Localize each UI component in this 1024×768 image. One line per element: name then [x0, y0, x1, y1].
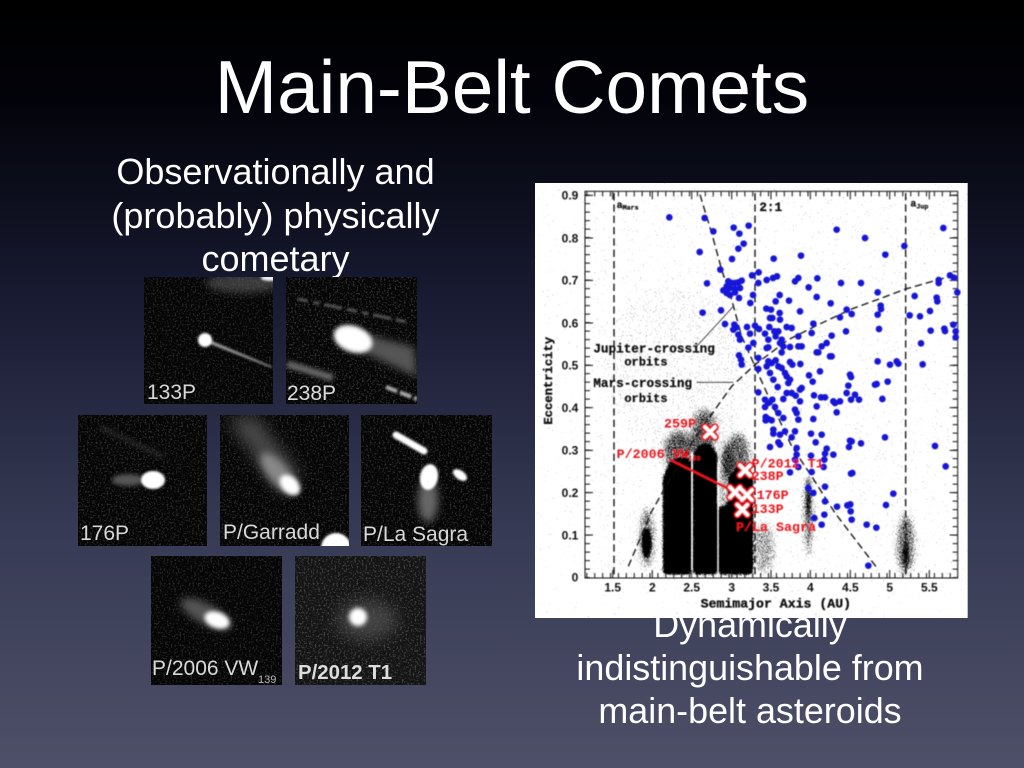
comet image: P/La Sagra [361, 415, 492, 546]
comet image: P/2006 VW139 [151, 556, 282, 686]
dense main belt [643, 445, 909, 574]
comet image: P/Garradd [220, 415, 349, 546]
text block: observationally cometary: (probably) physically [111, 195, 440, 236]
axis titles: Semimajor Axis (AU) [701, 597, 851, 612]
title: Main-Belt Comets [215, 45, 809, 129]
axis titles [542, 336, 851, 612]
axis tick labels: 0.4 [562, 401, 579, 415]
axis tick labels: 4.5 [842, 581, 859, 595]
axis tick labels: 0.1 [562, 528, 579, 542]
annotation labels: crossing orbits: orbits [624, 356, 668, 370]
red comet labels: 176P [757, 489, 789, 504]
panel: eccentricity vs semimajor axis chart [535, 183, 968, 618]
axis tick labels: 0.5 [562, 359, 579, 373]
main-belt comet markers [705, 427, 752, 515]
axis tick labels: 0.2 [562, 486, 579, 500]
comet image: 176P [78, 415, 207, 546]
red track line [670, 460, 728, 488]
annotation labels: crossing orbits: 2:1 [759, 200, 783, 215]
text block: dynamically indistinguishable: main-belt asteroids [598, 691, 902, 731]
comet image: P/La Sagra: P/La Sagra [363, 523, 468, 546]
text block: observationally cometary [111, 151, 440, 279]
axis tick labels: 3 [728, 581, 735, 595]
text block: dynamically indistinguishable: indistinguishable from [576, 648, 924, 688]
red comet labels: P/2012 T1 [752, 458, 824, 473]
asteroid scatter cloud [586, 192, 958, 578]
axis titles: Eccentricity [542, 336, 556, 425]
Kirkwood gaps [692, 453, 718, 576]
annotation labels: crossing orbits: a [910, 199, 916, 210]
comet image: P/2006 VW139: 139 [258, 674, 276, 686]
annotation labels: crossing orbits: a [617, 201, 623, 212]
red comet labels [617, 417, 824, 536]
red comet labels: 259P [664, 417, 696, 432]
annotation labels: crossing orbits: Jup [916, 202, 928, 210]
axis tick labels: 3.5 [763, 581, 780, 595]
red comet labels: P/2006 VW [617, 448, 689, 463]
axis tick labels: 1.5 [604, 581, 621, 595]
axis tick labels: 2.5 [683, 581, 700, 595]
dashed orbit boundaries and resonances [614, 193, 957, 577]
axis tick labels: 0.8 [562, 231, 579, 245]
red comet labels: 139 [689, 455, 701, 463]
axis tick labels: 0.7 [562, 274, 579, 288]
comet image: P/Garradd: P/Garradd [223, 521, 320, 544]
axis tick labels: 5.5 [921, 581, 938, 595]
comet image: 176P: 176P [80, 522, 129, 545]
axis tick labels: 4 [807, 581, 814, 595]
annotation labels: crossing orbits: orbits [624, 392, 668, 406]
red comet labels: P/La Sagra [736, 521, 816, 536]
axis tick labels: 0 [572, 571, 579, 585]
axis tick labels: 0.9 [562, 189, 579, 203]
comet image: P/2012 T1: P/2012 T1 [298, 662, 392, 684]
comet image: 133P: 133P [147, 381, 196, 404]
axis tick labels: 0.3 [562, 444, 579, 458]
text block: observationally cometary: cometary [201, 238, 350, 279]
comet image: 133P [144, 277, 273, 404]
axis tick labels: 5 [886, 581, 893, 595]
annotation labels: crossing orbits [593, 199, 928, 406]
comet image: P/2012 T1 [295, 556, 426, 685]
axis tick labels: 0.6 [562, 316, 579, 330]
annotation labels: crossing orbits: Mars-crossing [593, 376, 692, 391]
comet image: P/2006 VW139: P/2006 VW [152, 657, 258, 680]
annotation labels: crossing orbits: Jupiter-crossing [593, 342, 715, 357]
text block: dynamically indistinguishable [576, 605, 924, 731]
text block: observationally cometary: Observationally and [116, 151, 435, 192]
text block: dynamically indistinguishable: Dynamically [653, 605, 847, 645]
red comet labels: 238P [752, 470, 784, 485]
plot frame and ticks [585, 191, 958, 578]
axis tick labels [562, 189, 938, 595]
comet image: 238P [286, 277, 417, 405]
blue dots: comets and outer bodies [669, 217, 957, 566]
comet image: 238P: 238P [287, 382, 336, 405]
axis tick labels: 2 [649, 581, 656, 595]
annotation labels: crossing orbits: Mars [623, 203, 639, 211]
red comet labels: 133P [752, 503, 784, 518]
